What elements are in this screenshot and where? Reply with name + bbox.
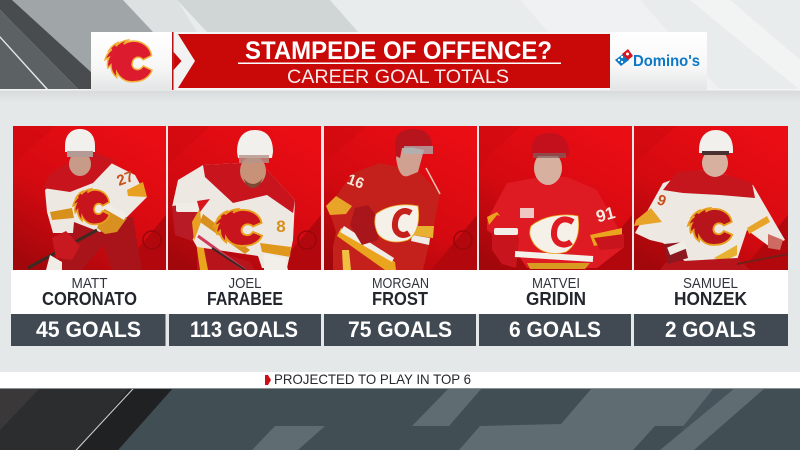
player name: SAMUEL xyxy=(683,275,738,292)
player name xyxy=(42,275,137,309)
player card: Gridin xyxy=(479,126,632,309)
photo: 16 xyxy=(345,171,366,193)
player name: HONZEK xyxy=(674,289,747,309)
goals: Frost xyxy=(324,314,476,346)
photo: 9 xyxy=(655,191,668,210)
panel: sponsor box xyxy=(610,32,707,90)
goals bars xyxy=(11,314,788,346)
player name: MATVEI xyxy=(532,275,580,292)
icon: domino tiles xyxy=(615,49,633,66)
icon: flames logo xyxy=(105,40,152,82)
player name: CORONATO xyxy=(42,289,137,309)
goals: Coronato: 45 GOALS xyxy=(36,317,141,342)
title: STAMPEDE OF OFFENCE? xyxy=(245,37,552,65)
photo xyxy=(634,126,788,270)
jersey logo xyxy=(375,205,419,242)
player name xyxy=(526,275,586,309)
player card: Farabee xyxy=(168,126,321,309)
top background xyxy=(0,0,800,90)
player card: Honzek xyxy=(634,126,788,309)
photo: 27 xyxy=(115,168,136,190)
jersey logo xyxy=(688,208,732,245)
sponsor name: Domino's xyxy=(633,53,700,70)
jersey logo xyxy=(73,189,109,224)
jersey logo xyxy=(530,215,579,254)
player name: GRIDIN xyxy=(526,289,586,309)
goals: Coronato xyxy=(11,314,166,346)
subtitle: CAREER GOAL TOTALS xyxy=(287,67,509,88)
photo xyxy=(13,126,166,270)
photo xyxy=(479,126,632,270)
player name: FROST xyxy=(372,289,428,309)
photo: 8 xyxy=(276,217,286,236)
player name xyxy=(207,275,283,309)
goals: Frost: 75 GOALS xyxy=(348,317,452,342)
panel: title banner xyxy=(174,32,610,90)
footnote text: PROJECTED TO PLAY IN TOP 6 xyxy=(274,371,471,387)
goals: Honzek: 2 GOALS xyxy=(665,317,756,342)
player name: JOEL xyxy=(228,275,262,292)
icon: red arrow xyxy=(265,375,271,385)
player name xyxy=(372,275,429,309)
player name: MORGAN xyxy=(372,275,429,292)
goals: Honzek xyxy=(634,314,788,346)
icon: chevron xyxy=(174,34,195,88)
player card: Coronato xyxy=(13,126,166,309)
player name: MATT xyxy=(72,275,108,292)
header banner xyxy=(91,32,707,90)
photo xyxy=(324,126,477,270)
photo xyxy=(168,126,321,270)
panel: team logo box xyxy=(91,32,172,90)
goals: Gridin: 6 GOALS xyxy=(509,317,601,342)
jersey logo xyxy=(214,209,262,246)
player card: Frost xyxy=(324,126,477,309)
goals: Gridin xyxy=(479,314,631,346)
main panel background xyxy=(0,89,800,373)
bottom background xyxy=(0,388,800,450)
goals: Farabee xyxy=(169,314,321,346)
photo: 91 xyxy=(594,203,617,226)
player name: FARABEE xyxy=(207,289,283,309)
player name xyxy=(674,275,747,309)
goals: Farabee: 113 GOALS xyxy=(190,317,298,342)
footnote strip xyxy=(0,371,800,388)
